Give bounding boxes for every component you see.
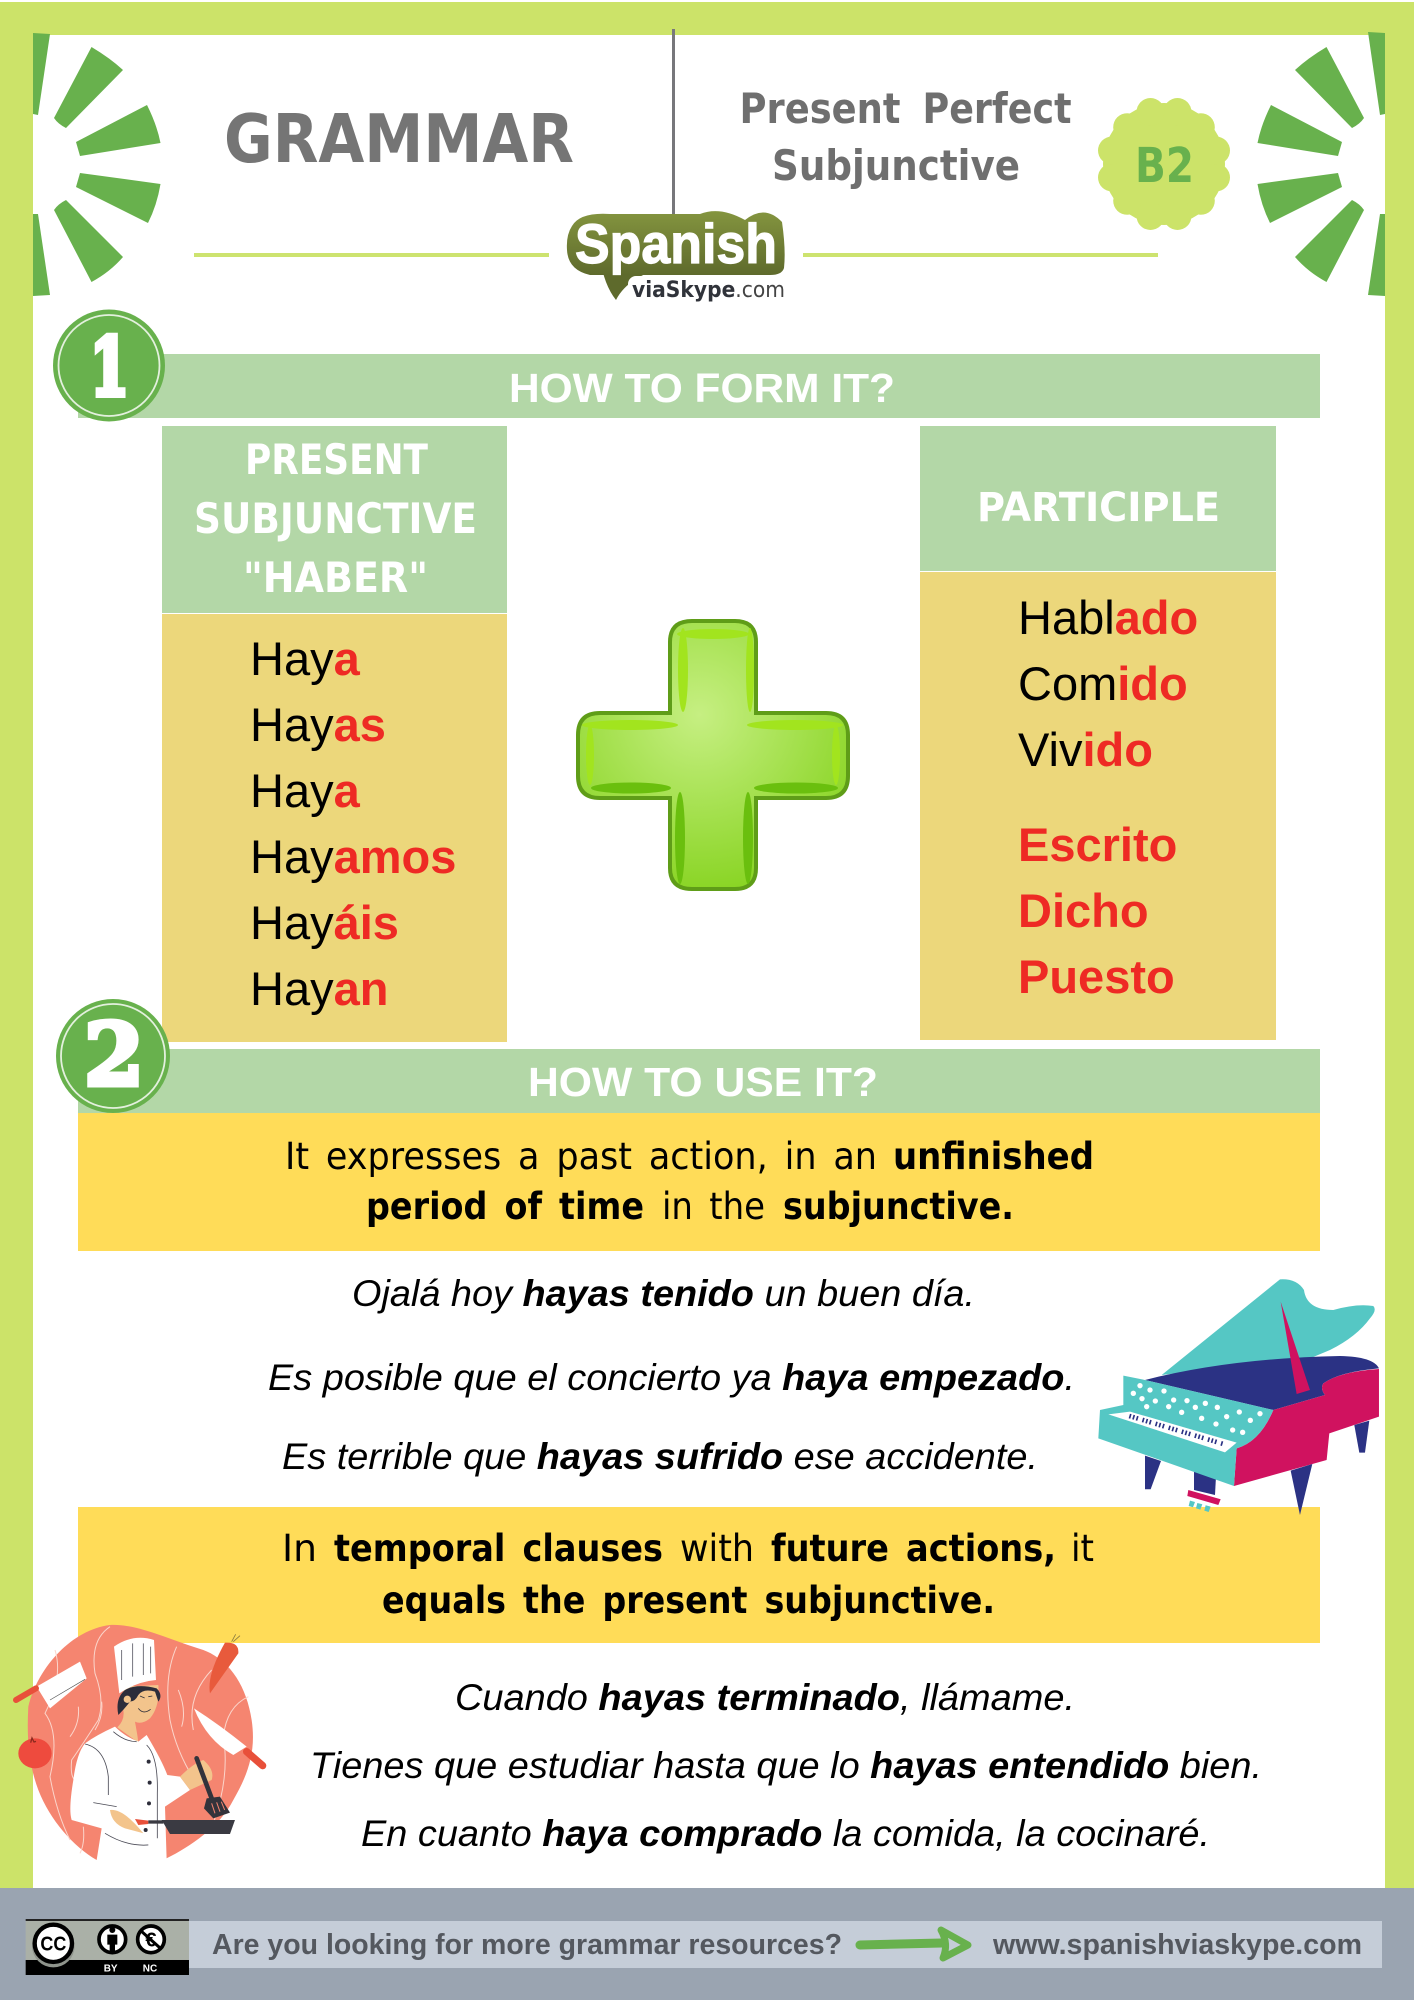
conjugation list: Hayamos [250, 830, 456, 883]
column heading: present subjunctive: "HABER" [243, 553, 428, 602]
chef hat [114, 1638, 156, 1693]
examples 1 [268, 1273, 1075, 1477]
sunburst right [1258, 32, 1385, 296]
title: GRAMMAR [224, 100, 574, 178]
website: www.spanishviaskype.com [992, 1929, 1362, 1961]
subtitle: Present [740, 84, 900, 133]
conjugation list: Haya [250, 632, 361, 685]
participle list: Dicho [1018, 884, 1149, 937]
number badge 1 [53, 310, 165, 422]
conjugation list: Hayas [250, 698, 386, 751]
license badge [26, 1919, 189, 1975]
conjugation list: Hayáis [250, 896, 399, 949]
participle list: Hablado [1018, 591, 1198, 644]
callout: usage 2: equals the present subjunctive. [382, 1579, 995, 1622]
subtitle: Perfect [922, 84, 1072, 133]
callout: usage 2: future actions, [771, 1527, 1056, 1570]
sunburst left [33, 33, 160, 296]
license badge: BY [104, 1963, 118, 1974]
callout: usage 1: period of time [366, 1185, 644, 1228]
callout: usage 1: in the [662, 1185, 765, 1228]
number badge 2 [56, 999, 170, 1113]
level badge B2: B2 [1135, 138, 1194, 194]
header rule right [803, 253, 1158, 257]
column heading: present subjunctive: PRESENT [245, 435, 428, 484]
spatula [197, 1758, 230, 1818]
callout: usage 1 [78, 1113, 1320, 1251]
license badge: NC [143, 1963, 157, 1974]
callout: usage 1: unfinished [893, 1135, 1094, 1178]
column heading: present subjunctive: SUBJUNCTIVE [194, 494, 477, 543]
section 2 header bar: HOW TO USE IT? [528, 1059, 878, 1105]
conjugation list: Hayan [250, 962, 388, 1015]
callout: usage 2 [78, 1507, 1320, 1643]
participle list: Puesto [1018, 950, 1175, 1003]
section 1 header bar: HOW TO FORM IT? [509, 365, 895, 411]
callout: usage 2: In [282, 1527, 317, 1570]
license badge: € [145, 1929, 157, 1951]
icon: plus sign [578, 621, 848, 889]
tomato [18, 1738, 52, 1768]
arrow [860, 1930, 968, 1958]
callout: usage 2: temporal clauses [334, 1527, 663, 1570]
subtitle: Subjunctive [772, 141, 1020, 190]
participle list: Vivido [1018, 723, 1153, 776]
section 2 header bar [78, 1049, 1320, 1113]
header rule left [194, 253, 549, 257]
callout: usage 2: with [680, 1527, 754, 1570]
panel: participle [920, 426, 1276, 1040]
logo: Spanish via Skype: Spanish [575, 212, 777, 275]
conjugation list: Haya [250, 764, 361, 817]
examples 2: En cuanto haya comprado la comida, la cocinaré. [361, 1813, 1210, 1854]
callout: usage 1: It expresses a past action, in an [285, 1135, 877, 1178]
chef knife [194, 1708, 263, 1766]
footer prompt: Are you looking for more grammar resources? [212, 1929, 842, 1961]
illustration: chef [16, 1625, 263, 1865]
subtitle [740, 84, 1072, 190]
number badge 1: 1 [90, 320, 129, 414]
examples 2: Cuando hayas terminado, llámame. [455, 1677, 1075, 1718]
examples 1: Ojalá hoy hayas tenido un buen día. [352, 1273, 975, 1314]
logo: Spanish via Skype: viaSkype.com [632, 278, 785, 303]
logo: Spanish via Skype [567, 211, 793, 304]
number badge 2: 2 [84, 1005, 144, 1106]
level badge B2 [1098, 98, 1230, 230]
panel: present subjunctive haber [162, 426, 507, 1042]
examples 2 [310, 1677, 1262, 1854]
column heading: present subjunctive [194, 435, 477, 602]
examples 2: Tienes que estudiar hasta que lo hayas entendido bien. [310, 1745, 1262, 1786]
participle list: Escrito [1018, 818, 1177, 871]
section 1 header bar [78, 354, 1320, 418]
examples 1: Es posible que el concierto ya haya empezado. [268, 1357, 1075, 1398]
header divider [672, 29, 675, 221]
carrot [209, 1634, 240, 1693]
frying pan [135, 1819, 235, 1834]
license badge: CC [40, 1933, 66, 1956]
participle list: Comido [1018, 657, 1188, 710]
participle list [1018, 591, 1198, 1003]
chef body [70, 1685, 212, 1865]
icon: piano [1098, 1279, 1379, 1515]
footer [0, 1888, 1414, 2000]
callout: usage 1: subjunctive. [783, 1185, 1014, 1228]
examples 1: Es terrible que hayas sufrido ese accidente. [282, 1436, 1038, 1477]
column heading: participle: PARTICIPLE [977, 485, 1220, 531]
conjugation list [250, 632, 456, 1015]
callout: usage 2: it [1071, 1527, 1094, 1570]
cleaver [16, 1662, 87, 1708]
